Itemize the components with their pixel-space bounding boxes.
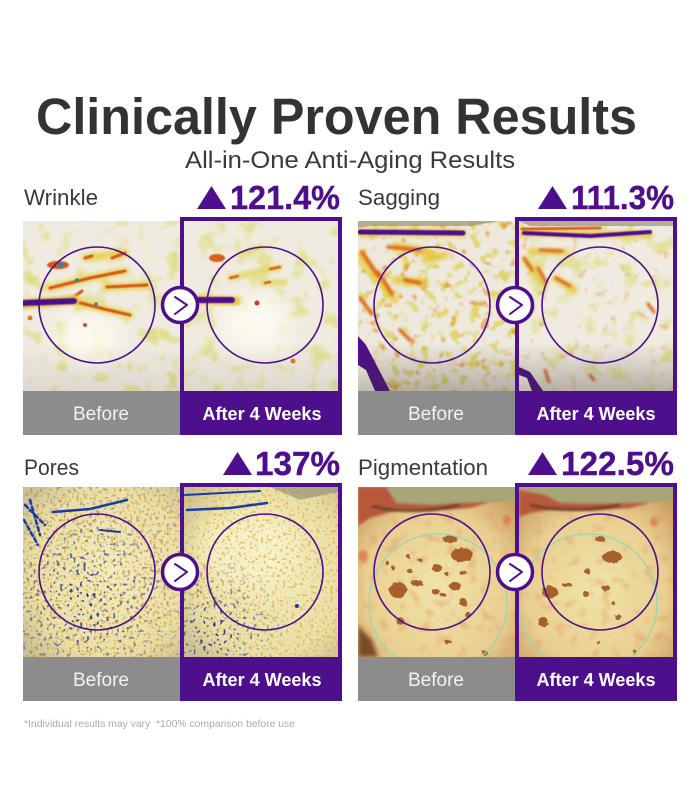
before image: sagging — [358, 221, 516, 391]
panel: pigmentation — [358, 445, 677, 701]
label: before — [23, 391, 180, 435]
panel: pores — [23, 445, 342, 701]
panel: sagging — [358, 179, 677, 435]
heading: Pigmentation: Pigmentation — [358, 455, 488, 480]
after circle — [207, 514, 323, 630]
after circle — [542, 247, 658, 363]
before circle — [374, 514, 490, 630]
before circle — [39, 514, 155, 630]
result: 121.4%: 121.4% — [230, 179, 340, 216]
label: before — [23, 657, 180, 701]
after image: wrinkle — [184, 221, 338, 391]
label: after 4 weeks: After 4 Weeks — [536, 669, 656, 690]
after circle — [207, 247, 323, 363]
result: 111.3%: 111.3% — [571, 179, 674, 216]
after frame — [517, 485, 675, 699]
before circle — [374, 247, 490, 363]
result: 122.5%: 122.5% — [561, 445, 674, 482]
after frame — [182, 485, 340, 699]
arrow button — [498, 554, 532, 590]
label: after 4 weeks — [180, 657, 342, 701]
label: before: Before — [73, 404, 129, 425]
label: before — [358, 391, 515, 435]
label: before: Before — [408, 670, 464, 691]
heading: Pores: Pores — [24, 455, 79, 480]
label: before — [358, 657, 515, 701]
after frame — [517, 219, 675, 433]
label: after 4 weeks — [515, 657, 677, 701]
subtitle: All-in-One Anti-Aging Results — [185, 147, 515, 174]
before circle — [39, 247, 155, 363]
after circle — [542, 514, 658, 630]
title: Clinically Proven Results — [36, 88, 637, 145]
label: before: Before — [408, 404, 464, 425]
before image: pigmentation — [358, 487, 516, 672]
before image: pores — [23, 487, 181, 657]
footnote: *Individual results may vary *100% comparison before use — [24, 718, 295, 730]
after image: sagging — [519, 221, 673, 391]
label: after 4 weeks — [180, 391, 342, 435]
after frame — [182, 219, 340, 433]
label: before: Before — [73, 670, 129, 691]
after image: pigmentation — [519, 487, 673, 672]
label: after 4 weeks: After 4 Weeks — [202, 669, 322, 690]
label: after 4 weeks — [515, 391, 677, 435]
label: after 4 weeks: After 4 Weeks — [202, 403, 322, 424]
after image: pores — [184, 487, 338, 657]
result: 137%: 137% — [255, 445, 340, 482]
arrow button — [498, 288, 532, 322]
heading: Sagging: Sagging — [358, 185, 440, 210]
heading: Wrinkle: Wrinkle — [24, 185, 98, 210]
label: after 4 weeks: After 4 Weeks — [536, 403, 656, 424]
before image: wrinkle — [23, 221, 181, 391]
arrow button — [162, 288, 198, 322]
arrow button — [162, 554, 198, 590]
panel: wrinkle — [23, 179, 342, 435]
